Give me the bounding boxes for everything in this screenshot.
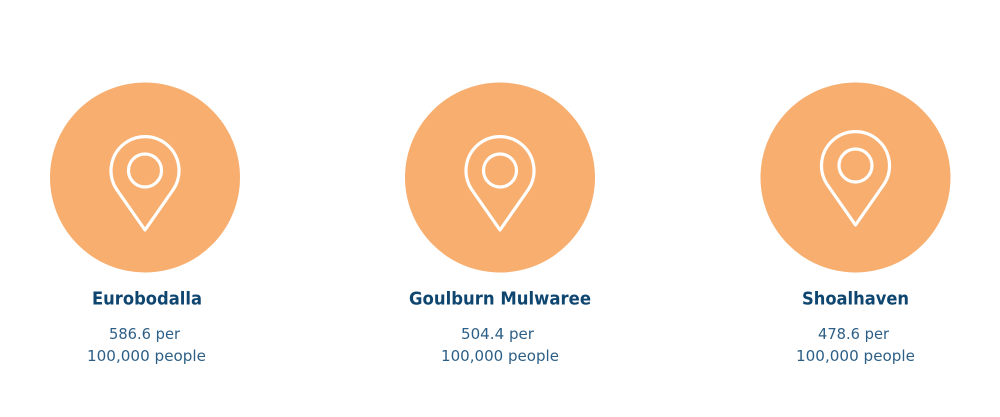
rate text: 504.4 per [461, 325, 535, 343]
heading: Eurobodalla: Eurobodalla [92, 290, 202, 310]
rate text [441, 325, 559, 365]
panel: Shoalhaven [760, 82, 950, 365]
icon: map pin [822, 132, 890, 225]
orange circle [405, 82, 595, 272]
panel: Goulburn Mulwaree [405, 82, 595, 365]
orange circle [760, 82, 950, 272]
rate text: 478.6 per [818, 325, 890, 343]
heading: Shoalhaven: Shoalhaven [802, 290, 909, 310]
panel: Eurobodalla [50, 82, 240, 365]
rate text [796, 325, 915, 365]
rate text: 100,000 people [796, 347, 915, 365]
rate text [87, 325, 206, 365]
icon: map pin [466, 137, 534, 230]
rate text: 100,000 people [87, 347, 206, 365]
rate text: 100,000 people [441, 347, 559, 365]
orange circle [50, 82, 240, 272]
icon: map pin [111, 137, 179, 230]
rate text: 586.6 per [109, 325, 181, 343]
heading: Goulburn Mulwaree: Goulburn Mulwaree [409, 290, 591, 310]
